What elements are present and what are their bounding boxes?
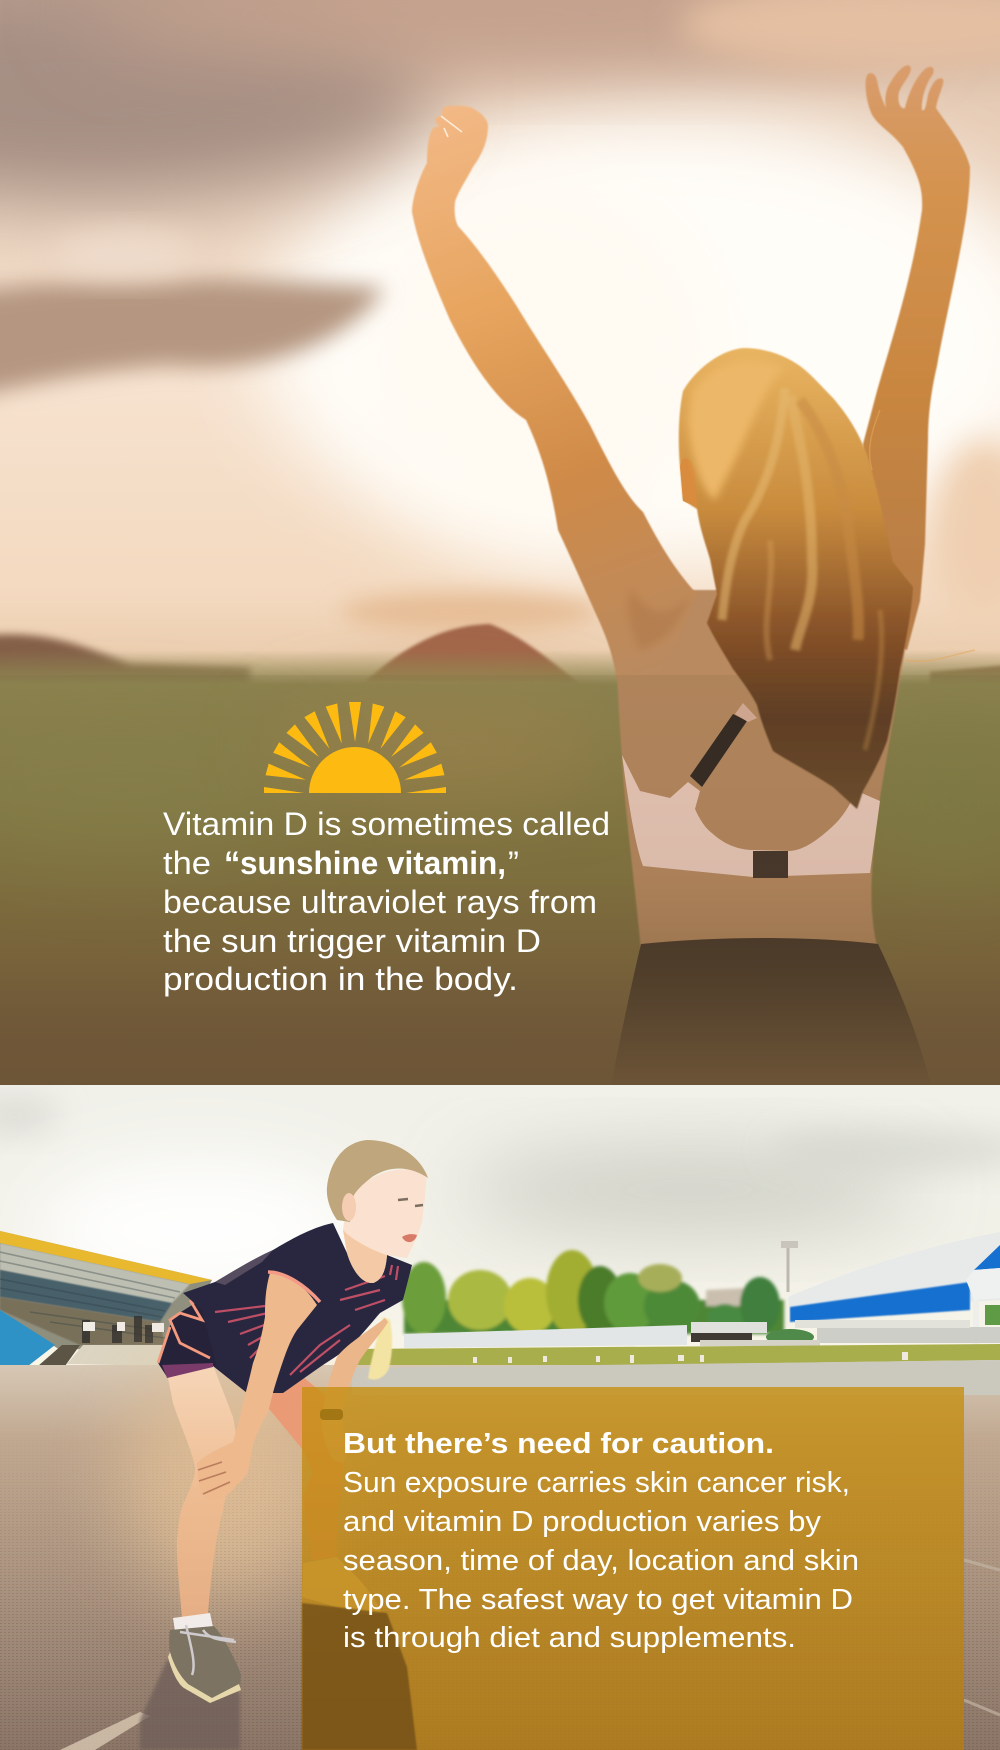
shorts: [616, 938, 924, 1061]
photo background: stadium, trees and track: [0, 1085, 1000, 1750]
stands: [0, 1231, 212, 1368]
text block: sunshine vitamin: “: [224, 845, 240, 881]
far arm and hand: [322, 1318, 388, 1463]
blue wall: [0, 1310, 55, 1368]
caution panel backdrop: [302, 1387, 964, 1750]
ear: [342, 1193, 356, 1221]
concourse: [67, 1345, 165, 1366]
floodlight pole: [781, 1241, 798, 1292]
underarm crease shading: [631, 600, 680, 646]
text block: sunshine vitamin: Vitamin D is sometimes called: [163, 806, 610, 842]
text block: need for caution: and vitamin D production varies by: [343, 1506, 822, 1538]
icon: sun with rays: [264, 702, 446, 799]
arena building: [788, 1232, 1000, 1353]
near shoe and sock: [168, 1613, 241, 1703]
right edge track lines: [964, 1560, 1000, 1715]
far leg: [250, 1377, 343, 1560]
ear: [680, 458, 697, 507]
text block: sunshine vitamin: because ultraviolet rays from: [163, 884, 597, 920]
bra strap and clasp: [690, 703, 788, 878]
hair: [327, 1140, 428, 1222]
girl figure: [140, 1140, 428, 1750]
neck: [343, 1230, 387, 1283]
hair ponytail: [679, 348, 913, 809]
eyes and mouth: [398, 1199, 423, 1206]
wall: [404, 1322, 820, 1348]
left raised arm: [412, 106, 697, 680]
text block: sunshine vitamin: sunshine vitamin,: [240, 845, 506, 881]
text block: need for caution: [343, 1428, 859, 1654]
finger gap highlight: [441, 116, 462, 137]
ponytail: [368, 1317, 392, 1380]
text block: need for caution: season, time of day, location and skin: [343, 1545, 859, 1577]
near leg: [168, 1365, 237, 1619]
shorts: [158, 1300, 262, 1393]
shirt: [183, 1223, 412, 1393]
watch: [320, 1409, 343, 1420]
spectators: [82, 1316, 153, 1343]
woman figure seen from behind: [412, 65, 975, 1090]
text block: sunshine vitamin: ”: [508, 845, 519, 881]
hair strands: [722, 388, 882, 750]
cast shadow of near foot: [140, 1660, 240, 1750]
crown highlight: [688, 360, 785, 500]
text block: sunshine vitamin: [163, 806, 610, 997]
near arm and hand: [197, 1273, 317, 1503]
text block: sunshine vitamin: the: [163, 845, 211, 881]
right raised arm and hand: [863, 65, 970, 650]
text block: need for caution: But there’s need for caution.: [343, 1428, 774, 1460]
text block: need for caution: is through diet and supplements.: [343, 1622, 796, 1654]
panel: girl resting on a running track: [0, 1085, 1000, 1750]
text block: need for caution: Sun exposure carries skin cancer risk,: [343, 1467, 850, 1499]
warm brown fade overlay: [0, 675, 1000, 1086]
text block: sunshine vitamin: production in the body.: [163, 961, 518, 997]
trees: [402, 1250, 784, 1334]
infield grass: [358, 1344, 1000, 1365]
wisps at arm: [870, 410, 975, 661]
head and face: [343, 1169, 427, 1258]
bra band: [622, 755, 880, 877]
photo background: sunset sky and field: [0, 0, 1000, 1086]
torso: [617, 590, 905, 950]
text block: sunshine vitamin: the sun trigger vitamin D: [163, 923, 541, 959]
panel: woman with raised arms at sunset: [0, 0, 1000, 1090]
track: [0, 1365, 1000, 1750]
sleeve trim: [268, 1272, 320, 1302]
far shoe: [302, 1557, 381, 1615]
text block: need for caution: type. The safest way to get vitamin D: [343, 1584, 853, 1616]
finger creases: [198, 1462, 230, 1494]
